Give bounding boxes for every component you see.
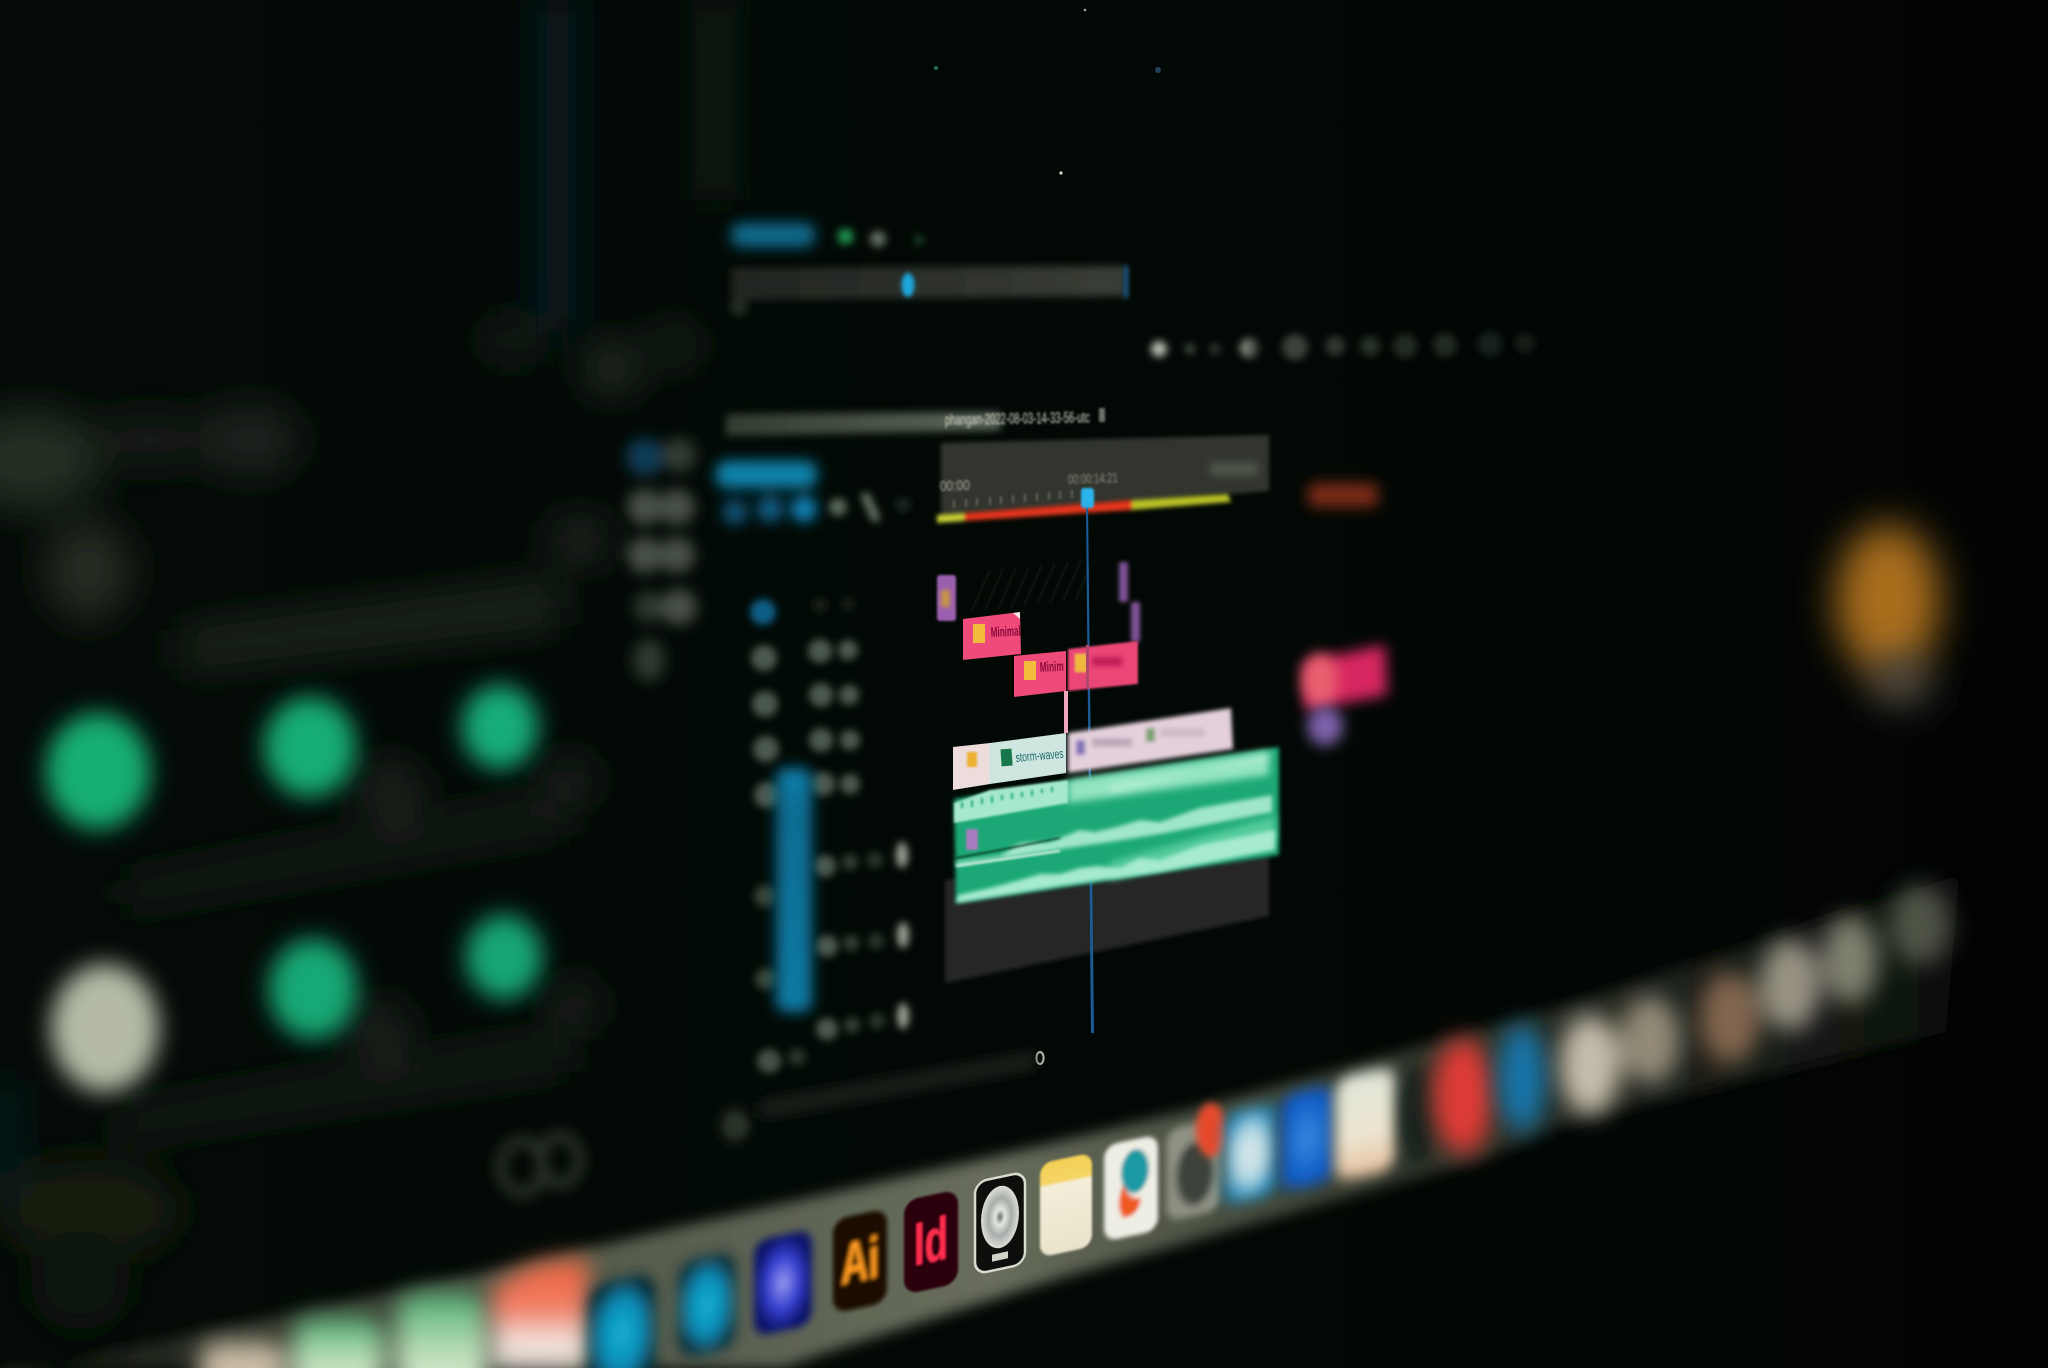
icon: Notes [1040,1152,1092,1258]
pink blob [1305,645,1387,710]
icon: premiere [754,1229,812,1337]
audio waveform 2 [956,830,1275,903]
knob 3 [462,685,538,769]
far-left blurred panels [0,0,726,1330]
knob 2 [264,697,356,797]
dock [0,875,1959,1368]
audio clip top waveform band [1068,751,1275,880]
slider knob [902,273,914,297]
grey lower track area [945,848,1269,983]
pink clip Minimal [963,612,1021,660]
pink clip blurred [1068,641,1138,691]
orange blob [1836,524,1940,676]
icon: dark app [1402,1065,1434,1165]
blue label [731,223,815,247]
hatch area [972,560,1090,610]
playhead over pink clip [1086,645,1089,688]
knob 6 [466,915,542,999]
ruler far label [1210,462,1258,476]
knob 1 [46,713,150,829]
red bar [1308,483,1378,507]
green dot [838,229,853,244]
scroll bar [760,1052,1036,1118]
icon: blue app 3 [1281,1084,1333,1192]
knob 4 (white) [51,964,159,1092]
stars [934,9,1161,175]
icon: Settings [1166,1118,1220,1222]
lilac blob [1307,706,1343,746]
ruler time start: 00:00 [940,477,970,495]
top slider area [730,223,1535,360]
pink stem [1064,691,1068,733]
toolbar [716,461,817,525]
pale glow under orange blob [1870,656,1930,704]
white line in audio [956,851,1060,866]
timeline panel [760,435,1279,1118]
icon: Freeform [1104,1134,1158,1242]
far right dock icons [1560,885,1950,1115]
blue label 2 [716,461,817,488]
audio waveform 1 [956,795,1272,866]
pale rings, bottom left [501,1136,579,1193]
filename text: phangan-2022-08-03-14-33-56-utc [945,409,1090,429]
cream clip [953,743,990,790]
track controls [725,597,909,1137]
pink clip Minimal: Minimal [990,622,1021,640]
icon: InDesign [904,1189,958,1295]
storm-waves clip [990,733,1066,784]
ruler time current: 00:00:14:21 [1068,469,1118,487]
pink clip Minim [1014,651,1066,697]
slider track [731,266,1126,300]
blurred channel knobs, left [46,685,542,1092]
audio black line [956,838,1060,858]
icon: red badge [1196,1103,1226,1157]
left side icon column [626,438,697,681]
icon: blue app 1 [589,1272,655,1368]
icon: red app [1433,1038,1493,1154]
icon: cream app [1335,1066,1395,1182]
icon: red/white app [492,1258,588,1368]
icon: Logic disc [975,1172,1025,1274]
track selector dot [750,599,776,625]
playhead knob [1081,488,1094,508]
purple markers [1119,562,1140,642]
icon: blue app 2 [679,1251,735,1359]
right side blurred elements [1302,483,1940,746]
audio track main [954,747,1279,903]
storm-waves clip: storm-waves [1015,746,1064,765]
audio fx chip [966,829,978,850]
ring marker [1036,1052,1044,1064]
slider end cap [1124,266,1128,298]
icon: Illustrator: Ai [841,1226,879,1298]
icon: far blue app [1498,1024,1546,1132]
knob 5 [269,939,357,1039]
purple clip [937,575,956,621]
dock bar [0,875,1959,1368]
pink clip Minim: Minim [1039,658,1064,675]
playback controls row [1151,332,1535,360]
sequence title [726,408,1105,436]
ruler ticks [954,490,1072,508]
playhead [1086,505,1094,1033]
icon: Illustrator [833,1208,887,1314]
blue volume meter [776,768,812,1012]
icon: InDesign: Id [914,1204,948,1278]
render bar [937,494,1231,523]
far left dock icons [200,1294,488,1368]
ruler header [941,435,1269,517]
icon: blue-white app [1224,1102,1276,1206]
lilac clip [1068,708,1233,773]
